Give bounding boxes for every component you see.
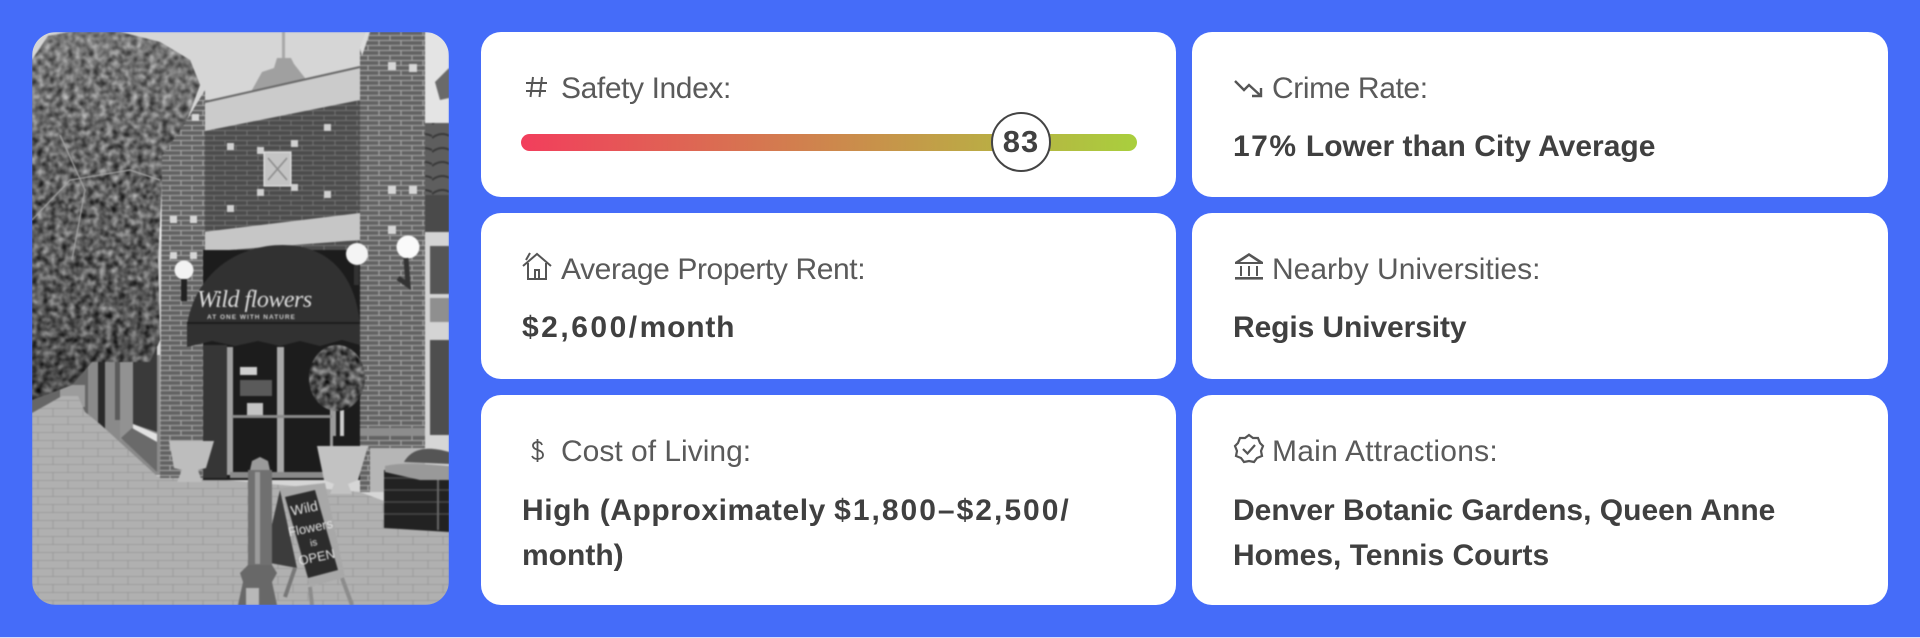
right roof tile <box>425 123 449 195</box>
icon: dollar <box>531 439 544 462</box>
right planter <box>317 446 368 494</box>
wall brick <box>205 100 363 255</box>
storefront <box>203 250 360 480</box>
label: cost of living: Cost of Living: <box>561 435 751 468</box>
awning: Wild flowers <box>197 287 312 313</box>
awning: AT ONE WITH NATURE <box>207 314 296 321</box>
crate <box>384 449 449 532</box>
panel: safety index <box>481 32 1176 197</box>
value: attractions <box>1233 494 1775 572</box>
value: universities: Regis University <box>1233 311 1466 344</box>
label: safety index: Safety Index: <box>561 72 731 105</box>
icon: trending down <box>1234 80 1262 98</box>
label: crime rate: Crime Rate: <box>1272 72 1428 105</box>
left planter <box>169 441 214 482</box>
spire <box>252 32 305 96</box>
chalk sandwich board: Wild <box>289 497 319 519</box>
sidewalk <box>32 396 449 605</box>
lamps <box>174 236 420 301</box>
value: crime rate: 17% Lower than City Average <box>1233 130 1655 163</box>
right pillar <box>360 32 425 492</box>
panel: nearby universities <box>1192 213 1888 379</box>
value: cost of living <box>522 494 1071 572</box>
lower band <box>203 213 360 252</box>
panel: average property rent <box>481 213 1176 379</box>
awning <box>187 245 360 347</box>
panel: cost of living <box>481 395 1176 605</box>
label: average property rent: Average Property Rent: <box>561 253 865 286</box>
potted tree <box>309 345 365 448</box>
photo: storefront with awning <box>32 32 449 605</box>
sky <box>32 32 449 502</box>
panel: main attractions <box>1192 395 1888 605</box>
right window <box>425 232 449 440</box>
left pillar <box>160 90 205 478</box>
bollard <box>238 457 277 605</box>
slider knob value <box>991 112 1051 172</box>
value: rent: $2,600/month <box>522 311 735 344</box>
panel: crime rate <box>1192 32 1888 197</box>
top cornice <box>205 67 360 131</box>
value: attractions: Denver Botanic Gardens, Queen Anne <box>1233 494 1775 527</box>
gap behind tree <box>159 200 162 240</box>
slider knob value: 83 <box>1003 124 1039 159</box>
value: attractions: Homes, Tennis Courts <box>1233 539 1549 572</box>
label: nearby universities: Nearby Universities: <box>1272 253 1540 286</box>
tree <box>32 32 200 400</box>
icon: institution <box>1235 253 1263 280</box>
label: main attractions: Main Attractions: <box>1272 435 1498 468</box>
value: cost of living: month) <box>522 539 624 572</box>
back building far left <box>88 345 160 475</box>
plaque and tiles <box>227 124 331 212</box>
chalk sandwich board <box>280 483 352 605</box>
chalk sandwich board: is <box>309 537 318 549</box>
chalk sandwich board: OPEN <box>297 546 336 568</box>
chalk sandwich board: Flowers <box>287 515 335 540</box>
sandwich board back <box>270 490 297 568</box>
icon: house <box>522 252 552 280</box>
icon: verified badge <box>1234 434 1264 464</box>
icon: hash <box>526 76 547 98</box>
slider track <box>521 134 1137 151</box>
distant trees <box>32 366 89 415</box>
value: cost of living: High (Approximately $1,800–$2,500/ <box>522 494 1071 527</box>
